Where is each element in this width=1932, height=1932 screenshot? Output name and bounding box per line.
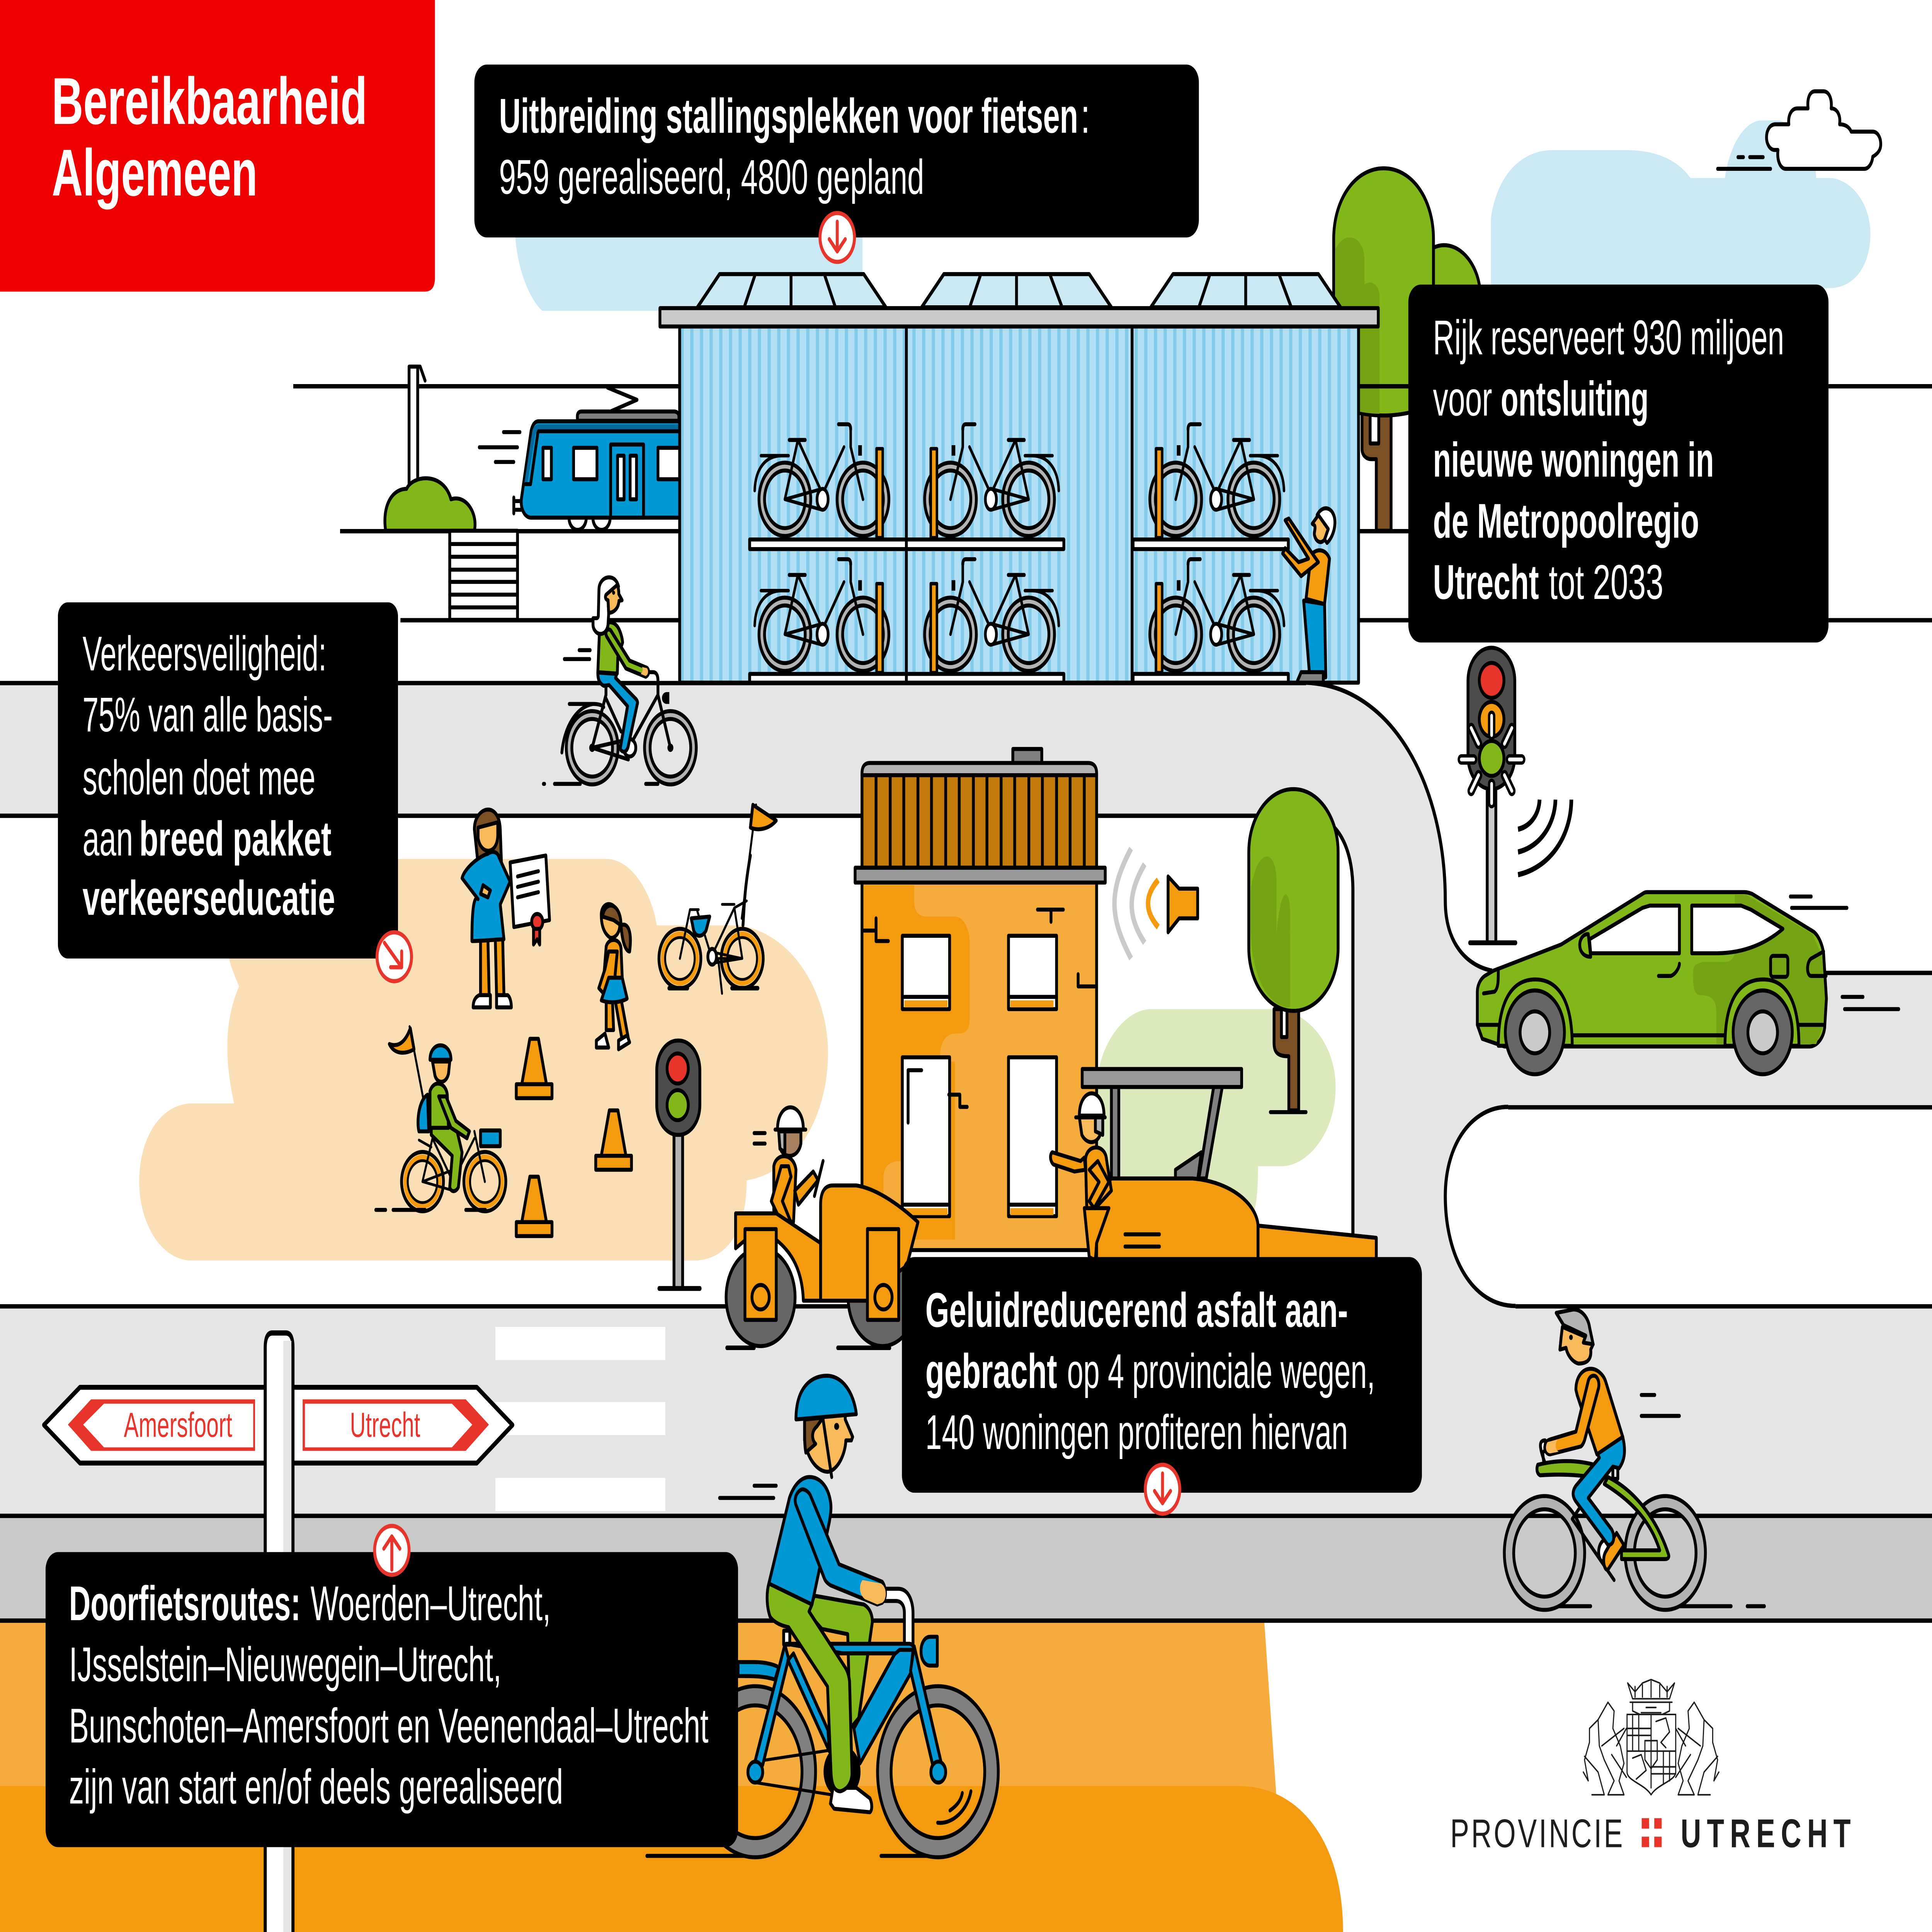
forks <box>745 1229 776 1320</box>
right sign: Utrecht <box>303 1399 489 1451</box>
roof slab <box>660 308 1378 327</box>
shelves <box>750 539 1288 683</box>
near leg <box>767 1583 852 1791</box>
callout: bike parking: 959 gerealiseerd, 4800 gepland <box>499 150 924 204</box>
callout: traffic safety: breed pakket <box>139 812 332 866</box>
leg and foot <box>1573 1437 1624 1570</box>
callout: traffic safety: 75% van alle basis- <box>83 688 333 742</box>
right cyclist <box>1504 1310 1764 1610</box>
canopy posts <box>1111 1086 1119 1182</box>
car body <box>1477 892 1827 1046</box>
signpost <box>44 1330 513 1932</box>
callout: quiet asphalt: gebracht <box>925 1344 1057 1399</box>
bush <box>385 478 475 531</box>
pantograph <box>607 388 637 411</box>
hand <box>860 1580 886 1604</box>
arm <box>606 629 649 677</box>
head <box>1556 1310 1593 1364</box>
windows <box>1590 906 1679 953</box>
callout: cycle routes: IJsselstein–Nieuwegein–Utrecht, <box>69 1638 502 1692</box>
green car <box>1477 892 1899 1074</box>
callout: housing investment: nieuwe woningen in <box>1433 433 1714 487</box>
callout: housing investment: Utrecht <box>1433 555 1539 610</box>
frame <box>1537 1461 1669 1580</box>
catenary pole <box>409 367 425 531</box>
coat of arms <box>1583 1680 1719 1795</box>
chimney <box>1013 749 1042 775</box>
canopy <box>1082 1069 1242 1087</box>
driver <box>754 1107 823 1233</box>
shoe <box>830 1788 872 1812</box>
tree behind right panel <box>1334 168 1480 531</box>
arm <box>1545 1376 1599 1454</box>
body shade <box>1693 895 1825 1044</box>
callout: housing investment <box>1408 284 1828 643</box>
handle <box>1541 1440 1546 1463</box>
windows <box>902 936 1056 1216</box>
icon: arrow down bike parking <box>820 213 854 262</box>
wheels <box>569 715 615 781</box>
callout: cycle routes: Doorfietsroutes: <box>69 1577 301 1631</box>
callout: quiet asphalt: Geluidreducerend asfalt aan- <box>925 1283 1348 1338</box>
handlebar <box>881 1589 913 1645</box>
callout: traffic safety: verkeerseducatie <box>83 871 335 925</box>
left sign: Amersfoort: Amersfoort <box>124 1405 232 1444</box>
hair <box>593 577 619 634</box>
house <box>855 749 1105 1250</box>
callout: traffic safety <box>58 602 398 959</box>
roof unit <box>577 412 679 421</box>
callout: traffic safety: scholen doet mee <box>83 751 315 805</box>
facade <box>862 882 1097 1250</box>
head <box>796 1376 856 1477</box>
facade shade <box>864 885 970 1240</box>
wheels <box>1498 980 1799 1074</box>
torso <box>1576 1369 1623 1454</box>
dark orange foreground <box>0 1786 1343 1932</box>
sign board <box>44 1387 513 1463</box>
frame <box>738 1637 946 1782</box>
parked bikes <box>755 424 1284 673</box>
traffic light right <box>1461 648 1571 943</box>
callout: traffic safety: Verkeersveiligheid: <box>83 627 327 681</box>
large cyclist <box>647 1376 998 1857</box>
callout: housing investment: voor <box>1433 372 1492 426</box>
road roller <box>726 1107 918 1348</box>
callout: bike parking: Uitbreiding stallingsplekken voor fietsen <box>499 89 1078 143</box>
callout: bike parking: : <box>1081 89 1090 143</box>
child cycling with flag <box>376 1027 506 1211</box>
face <box>605 585 622 613</box>
callout: housing investment: ontsluiting <box>1501 372 1649 426</box>
callout: quiet asphalt: 140 woningen profiteren hiervan <box>925 1405 1348 1460</box>
road edge lines <box>0 681 1932 1623</box>
rail tracks <box>293 384 1932 622</box>
wheels <box>1504 1496 1706 1610</box>
wordmark: PROVINCIE <box>1450 1811 1623 1856</box>
right sign: Utrecht: Utrecht <box>350 1405 420 1444</box>
wordmark <box>1450 1811 1851 1856</box>
sound waves and speaker <box>1114 849 1197 959</box>
walking girl <box>596 904 630 1049</box>
speed lines <box>479 432 520 462</box>
cloud top right <box>1491 121 1871 288</box>
red squares <box>1642 1818 1662 1847</box>
windows <box>543 448 551 479</box>
callout: traffic safety: aan <box>83 812 133 866</box>
facade plaster <box>883 1161 901 1215</box>
callout: cycle routes: Bunschoten–Amersfoort en Veenendaal–Utrecht <box>69 1699 709 1753</box>
green area <box>1098 1009 1336 1212</box>
traffic light left <box>657 1041 700 1289</box>
body <box>521 421 680 518</box>
sand area <box>139 859 828 1260</box>
icon: arrow down quiet asphalt <box>1145 1465 1180 1514</box>
woman cycling <box>543 577 696 784</box>
leg <box>598 672 638 752</box>
crosswalk <box>495 1327 665 1511</box>
left sign: Amersfoort <box>68 1399 255 1451</box>
orange foreground <box>0 1620 1277 1798</box>
speed lines <box>1790 896 1899 1009</box>
title panel: Bereikbaarheid <box>52 64 367 138</box>
person parking bike <box>1283 508 1335 683</box>
cycle lane <box>0 1515 1932 1620</box>
callout: cycle routes: zijn van start en/of deels gerealiseerd <box>69 1760 563 1814</box>
arm <box>795 1489 886 1604</box>
callout: housing investment: de Metropoolregio <box>1433 494 1699 548</box>
callout: quiet asphalt <box>902 1257 1422 1493</box>
callout: cycle routes: Woerden–Utrecht, <box>311 1577 551 1631</box>
torso <box>598 622 622 673</box>
eaves band <box>855 868 1105 883</box>
train <box>479 388 680 530</box>
teacher with certificate <box>462 810 549 1007</box>
worker <box>1051 1094 1111 1260</box>
callout: cycle routes <box>46 1552 738 1847</box>
road network <box>0 683 1932 1515</box>
logo: Provincie Utrecht <box>1450 1680 1851 1856</box>
title panel: Algemeen <box>52 136 257 210</box>
traffic cones <box>516 1039 631 1236</box>
torso <box>769 1477 831 1604</box>
wheels <box>569 505 586 530</box>
roof ridge <box>862 763 1097 775</box>
icon: arrow up cycle routes <box>374 1526 409 1575</box>
wheels <box>726 1248 795 1346</box>
facade cracks <box>862 910 1095 1122</box>
mirror <box>1580 934 1591 957</box>
crank <box>823 1745 861 1798</box>
pole <box>264 1330 294 1932</box>
callout: quiet asphalt: op 4 provinciale wegen, <box>1067 1344 1375 1399</box>
speed lines <box>543 650 658 784</box>
callout: housing investment: Rijk reserveert 930 miljoen <box>1433 311 1784 365</box>
title panel <box>0 0 435 292</box>
wheels <box>695 1686 998 1857</box>
callout: bike parking <box>474 65 1199 237</box>
stairs <box>450 531 517 620</box>
buffer <box>514 498 521 513</box>
roof tiles <box>862 775 1097 868</box>
tree right of house <box>1249 789 1338 1112</box>
roof panels <box>697 274 1340 307</box>
bike with flag <box>659 805 776 993</box>
far leg <box>808 1596 872 1728</box>
cloud behind bike storage <box>515 227 862 311</box>
outlined small cloud <box>1718 91 1881 169</box>
frame <box>562 672 670 759</box>
icon: arrow diagonal traffic safety <box>377 932 412 981</box>
storage wall <box>680 327 1359 683</box>
body <box>736 1185 918 1303</box>
body <box>1097 1179 1258 1274</box>
wordmark: UTRECHT <box>1680 1811 1851 1856</box>
bike storage building <box>660 274 1378 683</box>
saddle and stays <box>784 1631 790 1645</box>
asphalt paver <box>1051 1069 1376 1274</box>
callout: housing investment: tot 2033 <box>1549 555 1663 610</box>
car details <box>1477 964 1823 1035</box>
